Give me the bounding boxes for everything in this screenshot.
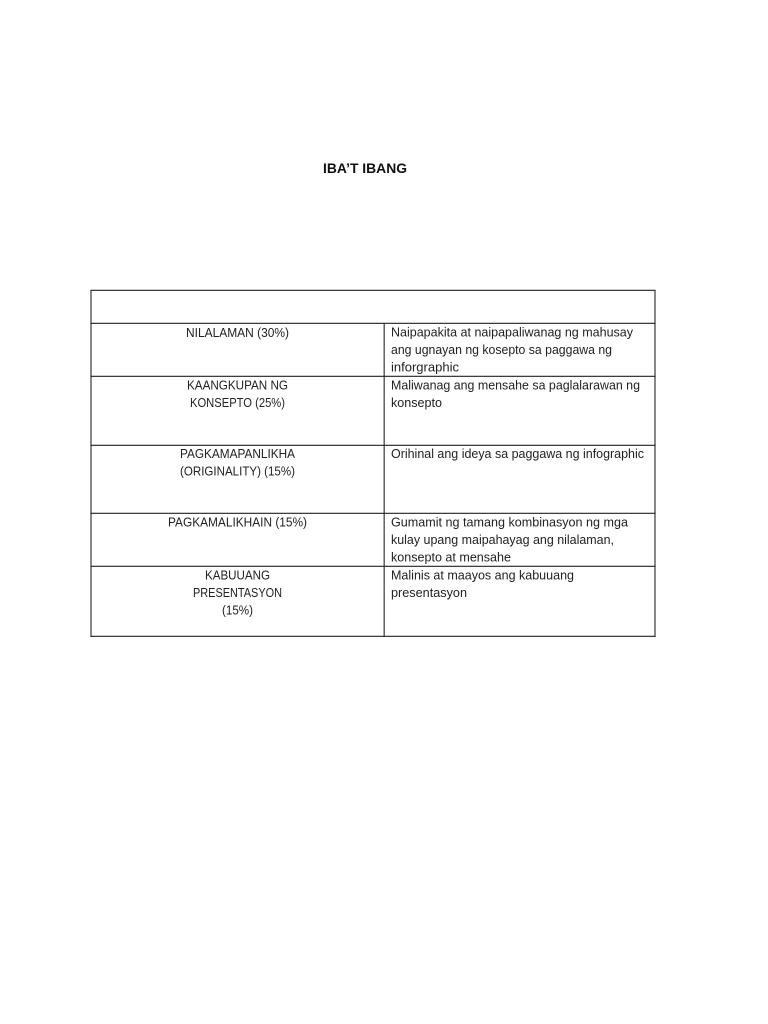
row: kabuuang presentasyon: (15%) xyxy=(222,604,253,618)
table grid xyxy=(90,290,656,637)
row: pagkamalikhain xyxy=(168,516,628,564)
row: kabuuang presentasyon: Malinis at maayos ang kabuuang xyxy=(391,568,574,582)
row: pagkamalikhain: PAGKAMALIKHAIN (15%) xyxy=(168,516,307,530)
row: kaangkupan ng konsepto: Maliwanag ang mensahe sa paglalarawan ng xyxy=(391,378,640,392)
row: nilalaman: ang ugnayan ng kosepto sa paggawa ng xyxy=(391,343,612,357)
row: pagkamapanlikha: Orihinal ang ideya sa paggawa ng infographic xyxy=(391,447,644,461)
row: nilalaman: Naipapakita at naipapaliwanag ng mahusay xyxy=(391,326,634,340)
title: IBA’T IBANG xyxy=(323,160,407,176)
rubric table xyxy=(90,290,656,637)
row: pagkamalikhain: Gumamit ng tamang kombinasyon ng mga xyxy=(391,516,628,530)
row: pagkamalikhain: konsepto at mensahe xyxy=(391,550,511,564)
row: kabuuang presentasyon: KABUUANG xyxy=(205,568,270,582)
row: pagkamapanlikha xyxy=(180,447,644,478)
row: kaangkupan ng konsepto: KAANGKUPAN NG xyxy=(187,378,288,392)
row: nilalaman: inforgraphic xyxy=(391,360,459,374)
row: kaangkupan ng konsepto: konsepto xyxy=(391,396,442,410)
row: kaangkupan ng konsepto xyxy=(187,378,640,410)
row: kabuuang presentasyon: PRESENTASYON xyxy=(193,586,282,600)
row: nilalaman xyxy=(186,326,634,374)
row: pagkamapanlikha: (ORIGINALITY) (15%) xyxy=(180,464,295,478)
row: kabuuang presentasyon: presentasyon xyxy=(391,586,467,600)
row: kabuuang presentasyon xyxy=(193,568,574,618)
row: pagkamalikhain: kulay upang maipahayag ang nilalaman, xyxy=(391,533,614,547)
row: kaangkupan ng konsepto: KONSEPTO (25%) xyxy=(190,396,285,410)
row: nilalaman: NILALAMAN (30%) xyxy=(186,326,289,340)
row: pagkamapanlikha: PAGKAMAPANLIKHA xyxy=(180,447,296,461)
